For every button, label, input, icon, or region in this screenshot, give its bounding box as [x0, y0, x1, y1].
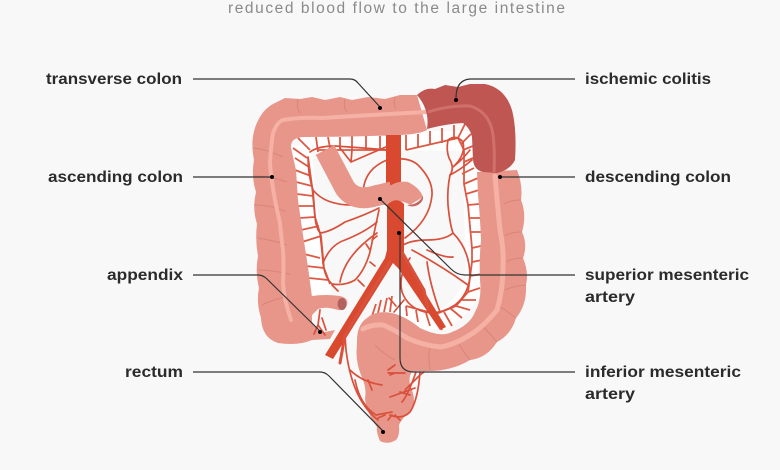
marginal arcades	[308, 138, 472, 314]
ischemic section	[417, 84, 516, 173]
label: superior mesenteric artery: superior mesenteric	[585, 267, 749, 284]
label: appendix: appendix	[107, 267, 183, 284]
label: transverse colon	[46, 71, 382, 110]
small bowel segment	[325, 150, 392, 198]
label: inferior mesenteric artery: inferior mesenteric	[585, 364, 741, 381]
label: ascending colon: ascending colon	[48, 169, 183, 186]
superior mesenteric artery	[386, 135, 401, 190]
label: superior mesenteric artery: artery	[585, 289, 635, 306]
label: inferior mesenteric artery: artery	[585, 386, 635, 403]
label: descending colon	[498, 169, 731, 186]
arteries and small bowel	[325, 135, 446, 420]
white mesentery band	[300, 141, 476, 320]
aorta	[325, 200, 446, 359]
mesentery vessels	[308, 137, 472, 313]
label: ischemic colitis: ischemic colitis	[585, 71, 711, 88]
label: ischemic colitis	[454, 71, 711, 102]
colon highlight band	[270, 112, 426, 320]
label: ascending colon	[48, 169, 274, 186]
label: transverse colon: transverse colon	[46, 71, 182, 88]
label: inferior mesenteric artery	[397, 231, 741, 403]
colon shading folds	[254, 97, 526, 370]
label: appendix	[107, 267, 322, 334]
label: superior mesenteric artery	[378, 197, 749, 306]
rectal vessels	[350, 365, 424, 420]
colon: ascending, transverse and descending	[252, 95, 427, 344]
label: rectum: rectum	[125, 364, 183, 381]
vasa recta: capillary ladder	[293, 124, 482, 330]
subtitle: reduced blood flow to the large intestine	[228, 0, 565, 17]
label: rectum	[125, 364, 385, 434]
label: descending colon: descending colon	[585, 169, 731, 186]
illustration: large intestine	[252, 84, 527, 443]
appendix	[312, 295, 347, 315]
